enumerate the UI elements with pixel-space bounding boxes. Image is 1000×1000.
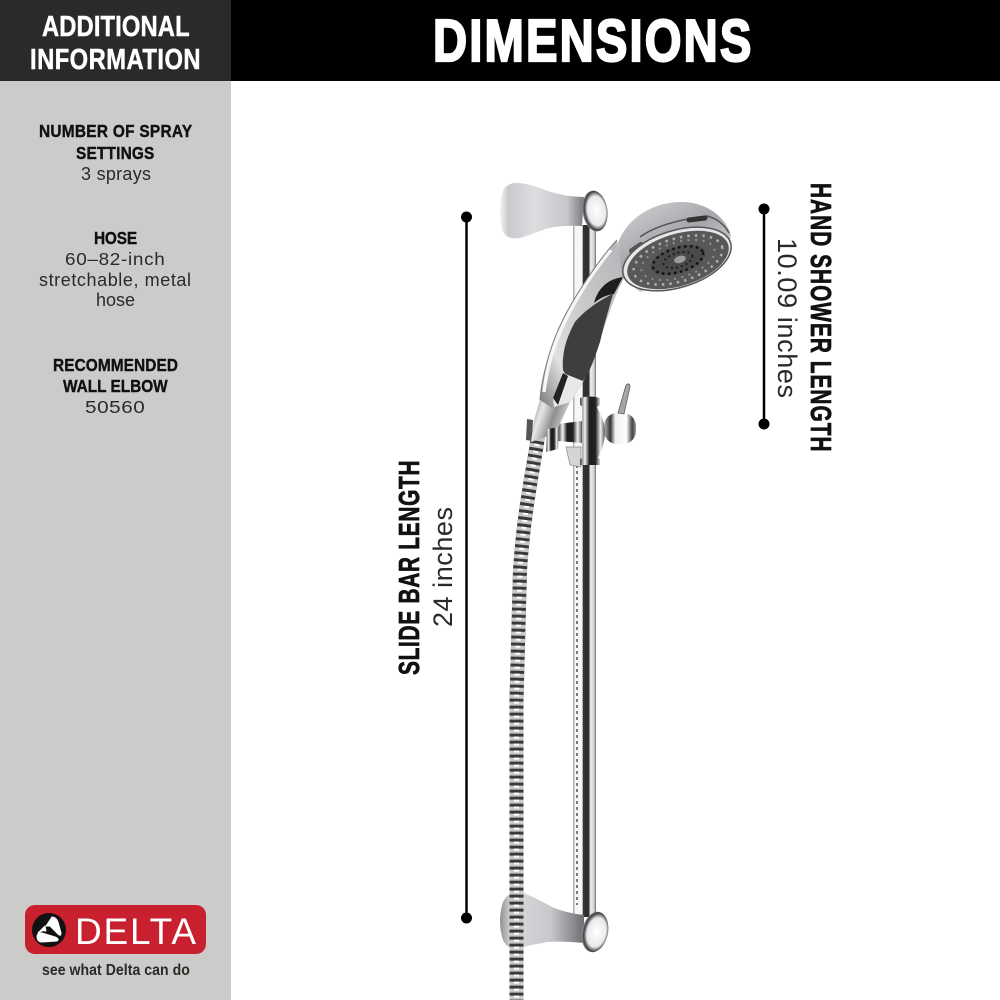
text block: number of spray settings: NUMBER OF SPRAY <box>39 122 192 141</box>
label: hand shower length: HAND SHOWER LENGTH <box>804 183 836 452</box>
text block: recommended wall elbow <box>53 356 178 418</box>
header: additional information: ADDITIONAL <box>42 10 190 43</box>
logo: Delta: DELTA <box>75 911 196 952</box>
text block: recommended wall elbow: 50560 <box>85 397 145 418</box>
mount with lever <box>526 384 636 467</box>
lower bracket <box>500 892 612 955</box>
dark reflection near head <box>594 277 623 303</box>
header: additional information: INFORMATION <box>30 43 201 76</box>
text block: number of spray settings: SETTINGS <box>76 144 154 163</box>
header: dimensions <box>231 0 1000 81</box>
logo: Delta <box>25 905 206 979</box>
shower head <box>615 202 739 303</box>
text block: number of spray settings: 3 sprays <box>81 164 151 184</box>
icon: Delta triangle <box>32 913 66 947</box>
upper bracket <box>500 183 610 238</box>
text block: recommended wall elbow: WALL ELBOW <box>63 377 168 396</box>
hose <box>516 437 538 1000</box>
text block: number of spray settings <box>39 122 192 184</box>
slide bar <box>573 225 596 917</box>
panel: sidebar background <box>0 0 231 1000</box>
label: slide bar length: SLIDE BAR LENGTH <box>394 460 426 675</box>
illustration: hand shower on slide bar <box>500 183 739 1000</box>
label: slide bar length <box>394 460 458 675</box>
logo: Delta: see what Delta can do <box>42 961 190 979</box>
dimension line: hand shower <box>758 204 770 430</box>
text block: recommended wall elbow: RECOMMENDED <box>53 356 178 375</box>
hand shower handle <box>540 240 624 408</box>
label: hand shower length <box>772 183 836 452</box>
rubber grip <box>563 294 613 381</box>
dimension line: slide bar <box>461 212 472 924</box>
header: dimensions: DIMENSIONS <box>433 9 751 74</box>
label: slide bar length: 24 inches <box>428 507 458 627</box>
label: hand shower length: 10.09 inches <box>772 238 802 398</box>
collar <box>553 373 583 407</box>
header: additional information <box>0 0 231 81</box>
text block: hose: HOSE <box>94 229 137 248</box>
text block: hose: stretchable, metal <box>39 270 191 290</box>
text block: hose: 60–82-inch <box>65 248 165 269</box>
spray face <box>620 220 736 300</box>
text block: hose <box>39 229 191 310</box>
text block: hose: hose <box>96 290 135 310</box>
